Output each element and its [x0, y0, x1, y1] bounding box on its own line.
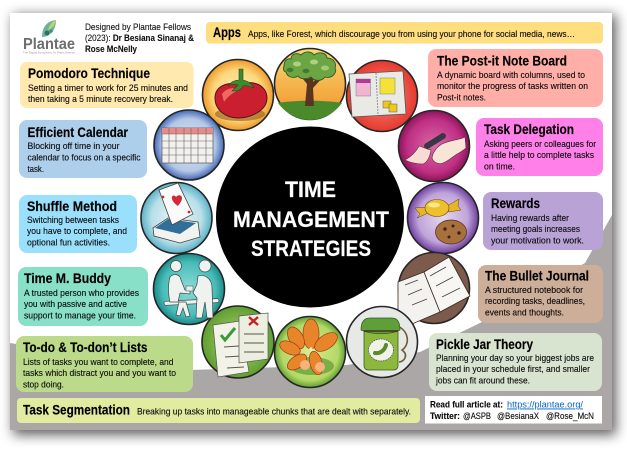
panel: Pomodoro Technique [20, 62, 194, 108]
panel: Pickle Jar Theory: Pickle Jar Theory [436, 337, 533, 352]
panel: The Post-it Note Board: The Post-it Note Board [437, 54, 567, 68]
panel: Rewards: Rewards [491, 196, 540, 211]
panel: Rewards: Having rewards after [491, 213, 569, 223]
panel: Task Segmentation: Breaking up tasks into manageable chunks that are dealt with separately. [137, 406, 411, 416]
panel: Rewards [483, 192, 603, 250]
panel: Pomodoro Technique: then taking a 5 minute recovery break. [28, 94, 173, 104]
panel: To-do and To-don't Lists [16, 336, 193, 392]
panel: Pickle Jar Theory [429, 333, 602, 391]
central circle with title: STRATEGIES [251, 236, 371, 261]
panel: Efficient Calendar: Efficient Calendar [28, 125, 129, 140]
panel: Time M. Buddy: A trusted person who provides [24, 288, 139, 298]
icon: post-it board [346, 60, 418, 132]
panel: Pickle Jar Theory: placed in your schedule first, and smaller [436, 364, 590, 374]
panel: To-do and To-don't Lists: stop doing. [23, 380, 64, 390]
icon: to-do lists [202, 306, 274, 378]
panel: Time M. Buddy: support to manage your time. [24, 310, 136, 320]
designer credits: (2023): Dr Besiana Sinanaj & [85, 33, 194, 43]
logo: Plantae [23, 20, 75, 54]
icon: tree [274, 48, 346, 120]
icon: rewards candy and cookie [408, 182, 478, 254]
panel: Time M. Buddy: you with passive and active [24, 299, 127, 309]
panel: Task Delegation: a little help to complete tasks [484, 150, 594, 160]
panel: Efficient Calendar: calendar to focus on a specific [28, 152, 141, 162]
panel: Rewards: your motivation to work. [491, 236, 584, 246]
panel: Pomodoro Technique: Pomodoro Technique [28, 66, 150, 81]
panel: Efficient Calendar: task. [28, 164, 44, 174]
icon: buddy [154, 254, 224, 324]
panel: Task Delegation [476, 118, 603, 176]
panel: Task Segmentation: Task Segmentation [23, 402, 130, 418]
icon: bullet journal [398, 252, 470, 324]
panel: Efficient Calendar [19, 120, 147, 178]
icon: tomato [202, 60, 274, 130]
panel: Pickle Jar Theory: jobs can fit around these. [435, 376, 530, 386]
panel: Task Delegation: Asking peers or colleagues for [484, 139, 596, 149]
panel: The Post-it Note Board [428, 49, 603, 107]
logo: Plantae: The Digital Ecosystem for Plant Science [23, 50, 75, 54]
icon: calendar [154, 110, 224, 180]
central circle with title: TIME [285, 177, 336, 202]
panel: To-do and To-don't Lists: Lists of tasks you want to complete, and [23, 357, 174, 367]
panel: The Post-it Note Board: A dynamic board with columns, used to [437, 70, 585, 80]
icon: shuffle cards [141, 182, 212, 254]
panel: To-do and To-don't Lists: To-do & To-don’t Lists [23, 340, 148, 355]
panel: article link and Twitter handles: Read full article at: [430, 400, 503, 410]
panel: Pickle Jar Theory: Planning your day so your biggest jobs are [436, 353, 594, 363]
panel: The Bullet Journal [478, 265, 603, 323]
panel: Apps [206, 22, 603, 44]
panel: The Bullet Journal: A structured notebook for [485, 285, 583, 295]
icon: orange segments [274, 316, 346, 388]
panel: Shuffle Method: you have to complete, and [27, 226, 127, 236]
panel: Apps: Apps [213, 25, 241, 40]
panel: The Post-it Note Board: monitor the progress of tasks written on [437, 81, 588, 91]
icon: pickle jar [346, 306, 418, 378]
panel: article link and Twitter handles [425, 396, 602, 424]
panel: The Bullet Journal: recording tasks, deadlines, [485, 296, 585, 306]
designer credits: Rose McNelly [85, 44, 137, 54]
panel: Shuffle Method: optional fun activities. [27, 238, 110, 248]
logo: Plantae: Plantae [23, 36, 75, 53]
panel: Task Delegation: Task Delegation [484, 122, 574, 137]
panel: The Bullet Journal: events and thoughts. [485, 308, 564, 318]
panel: Shuffle Method: Shuffle Method [27, 199, 117, 214]
central circle with title [216, 126, 404, 308]
panel: Rewards: meeting goals increases [491, 224, 580, 234]
panel: The Bullet Journal: The Bullet Journal [485, 268, 589, 284]
panel: article link and Twitter handles: @Rose_McN [546, 411, 594, 421]
central circle with title: MANAGEMENT [233, 207, 389, 232]
panel: article link and Twitter handles: @BesianaX [497, 411, 539, 421]
icon: task delegation hands [398, 110, 470, 182]
panel: Apps: Apps, like Forest, which discourage you from using your phone for social media, news… [248, 29, 575, 39]
panel: Pomodoro Technique: Setting a timer to work for 25 minutes and [28, 83, 188, 93]
panel: Time M. Buddy: Time M. Buddy [24, 271, 111, 286]
panel: article link and Twitter handles: @ASPB [463, 411, 491, 421]
panel: article link and Twitter handles: Twitter: [430, 411, 460, 421]
panel: Shuffle Method [19, 195, 137, 253]
designer credits [85, 22, 194, 54]
grey background band [10, 215, 612, 430]
panel: Task Delegation: on time. [484, 162, 515, 172]
panel: To-do and To-don't Lists: tasks which distract you and you want to [23, 368, 176, 378]
designer credits: Designed by Plantae Fellows [85, 22, 191, 32]
panel: Time M. Buddy [18, 267, 148, 326]
panel: Task Segmentation [17, 398, 420, 423]
panel: article link and Twitter handles: https://plantae.org/ [507, 400, 583, 410]
panel: Shuffle Method: Switching between tasks [27, 215, 119, 225]
panel: The Post-it Note Board: Post-it notes. [437, 92, 486, 102]
panel: Efficient Calendar: Blocking off time in your [28, 141, 120, 151]
